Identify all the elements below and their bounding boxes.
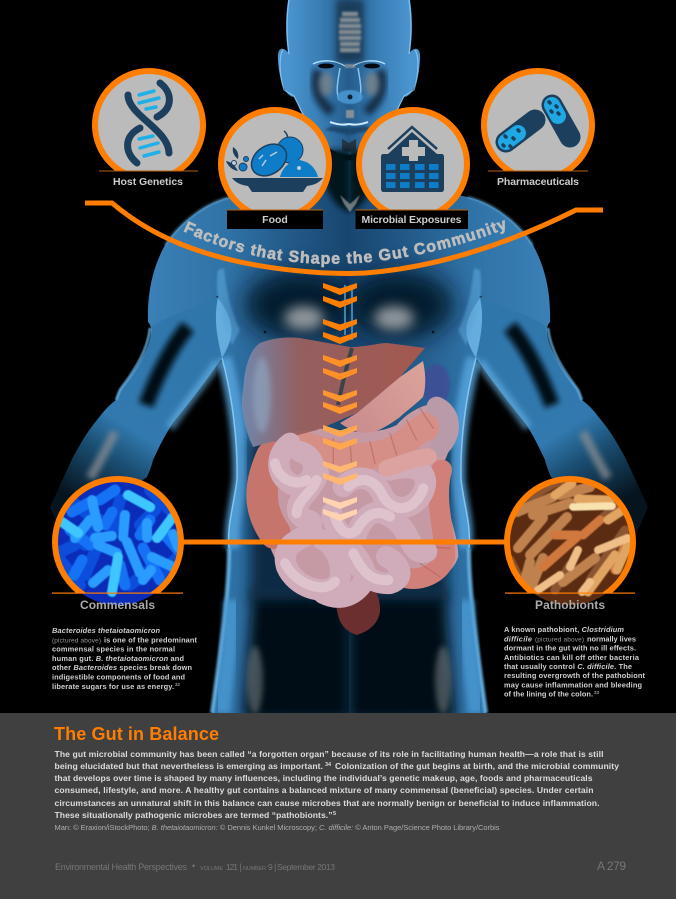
chevron arrows (323, 283, 357, 521)
description: difficile (504, 634, 532, 643)
panel: commensals (50, 475, 198, 691)
journal footer: 9 (268, 862, 273, 872)
description: of the lining of the colon. (504, 690, 593, 699)
description: human gut. B. thetaiotaomicron and (52, 654, 184, 663)
page number: A 279 (597, 859, 626, 873)
description: dormant in the gut with no ill effects. (504, 644, 636, 652)
circle (359, 110, 467, 218)
label box: Food (262, 214, 288, 226)
journal footer: • (192, 861, 195, 871)
icon: capsules (503, 102, 570, 147)
heading: Commensals (80, 598, 155, 612)
journal footer: NUMBER (243, 866, 266, 872)
body text: These situationally pathogenic microbes are termed “pathobionts.” (54, 810, 332, 820)
description: 32 (175, 682, 181, 687)
description (504, 625, 646, 699)
ring (55, 479, 181, 605)
body text: 34 (325, 762, 332, 768)
liver (242, 338, 425, 447)
body text: that develops over time is shaped by many influences, including the individual’s genetic makeup, age, foods and pharmaceuticals (54, 773, 593, 783)
description: liberate sugars for use as energy. (52, 682, 174, 691)
intestinal mass (256, 404, 458, 603)
body text: being elucidated but that nevertheless is emerging as important. (54, 761, 323, 771)
label: Host Genetics (113, 176, 183, 188)
curved bracket (85, 203, 603, 273)
organs (242, 338, 458, 635)
journal footer: 121 (226, 862, 238, 872)
spleen (422, 364, 450, 406)
ring (507, 479, 633, 605)
body text: consumed, lifestyle, and more. A healthy gut contains a balanced mixture of many commensal (beneficial) species. Under certain (54, 785, 594, 795)
human figure (50, 0, 648, 720)
description: Antibiotics can kill off other bacteria (504, 653, 640, 662)
journal footer: Environmental Health Perspectives (55, 862, 188, 872)
circle (484, 71, 592, 179)
micrograph: blue rods (58, 482, 178, 605)
factor: pharmaceuticals (484, 71, 592, 188)
heading: Pathobionts (535, 598, 605, 612)
description: Bacteroides thetaiotaomicron (52, 626, 160, 635)
description: may cause inflammation and bleeding (504, 680, 642, 690)
colon (262, 407, 450, 579)
heading: The Gut in Balance (54, 724, 219, 744)
stomach (340, 361, 425, 433)
body text: 5 (333, 811, 336, 817)
small intestine (275, 443, 428, 597)
panel: the gut in balance (0, 713, 676, 899)
description: normally lives (587, 634, 636, 643)
description: other Bacteroides species break down (52, 663, 192, 672)
description: (pictured above) (535, 636, 584, 643)
connector line between microbes (180, 540, 510, 544)
liver highlights (253, 357, 271, 433)
background (0, 0, 676, 713)
description: commensal species in the normal (52, 645, 175, 654)
body text (54, 749, 619, 820)
label: Pharmaceuticals (497, 176, 579, 188)
description: that usually control C. difficile. The (504, 662, 632, 671)
credits: Man: © Eraxion/iStockPhoto; B. thetaiotaomicron: © Dennis Kunkel Microscopy; C. difficile: © Anton Page/Science Photo Library/Corbis (54, 823, 500, 832)
body text: The gut microbial community has been called “a forgotten organ” because of its role in facilitating human health—a role that is still (54, 749, 604, 759)
icon: hospital (381, 127, 444, 192)
icon: dna (128, 83, 169, 163)
factor: microbial exposures (356, 110, 468, 229)
description: is one of the predominant (104, 635, 198, 644)
oesophagus (338, 348, 352, 405)
circle (221, 110, 329, 218)
description: A known pathobiont, Clostridium (504, 625, 624, 634)
journal footer: | (240, 862, 242, 872)
description: (pictured above) (52, 637, 101, 644)
journal footer: | (274, 862, 276, 872)
circle (95, 71, 203, 179)
face centre detail (336, 0, 364, 340)
journal footer (55, 861, 335, 872)
label box: Microbial Exposures (362, 214, 462, 226)
description (52, 626, 198, 691)
description: resulting overgrowth of the pathobiont (504, 671, 646, 680)
description: 33 (594, 690, 600, 695)
factor: host genetics (95, 71, 203, 188)
factor: food (221, 110, 329, 229)
description: indigestible components of food and (52, 672, 185, 682)
body text: Colonization of the gut begins at birth, and the microbial community (335, 761, 619, 771)
panel: pathobionts (502, 475, 646, 699)
journal footer: September 2013 (277, 862, 335, 872)
body text: circumstances an unnatural shift in this balance can cause microbes that are normally benign or beneficial to induce inflammation. (54, 798, 600, 808)
micrograph: orange rods (510, 482, 630, 605)
rectum (336, 575, 380, 635)
icon: food bowl (226, 131, 323, 192)
journal footer: VOLUME (200, 866, 223, 872)
curved title: Factors that Shape the Gut Community (184, 220, 505, 268)
